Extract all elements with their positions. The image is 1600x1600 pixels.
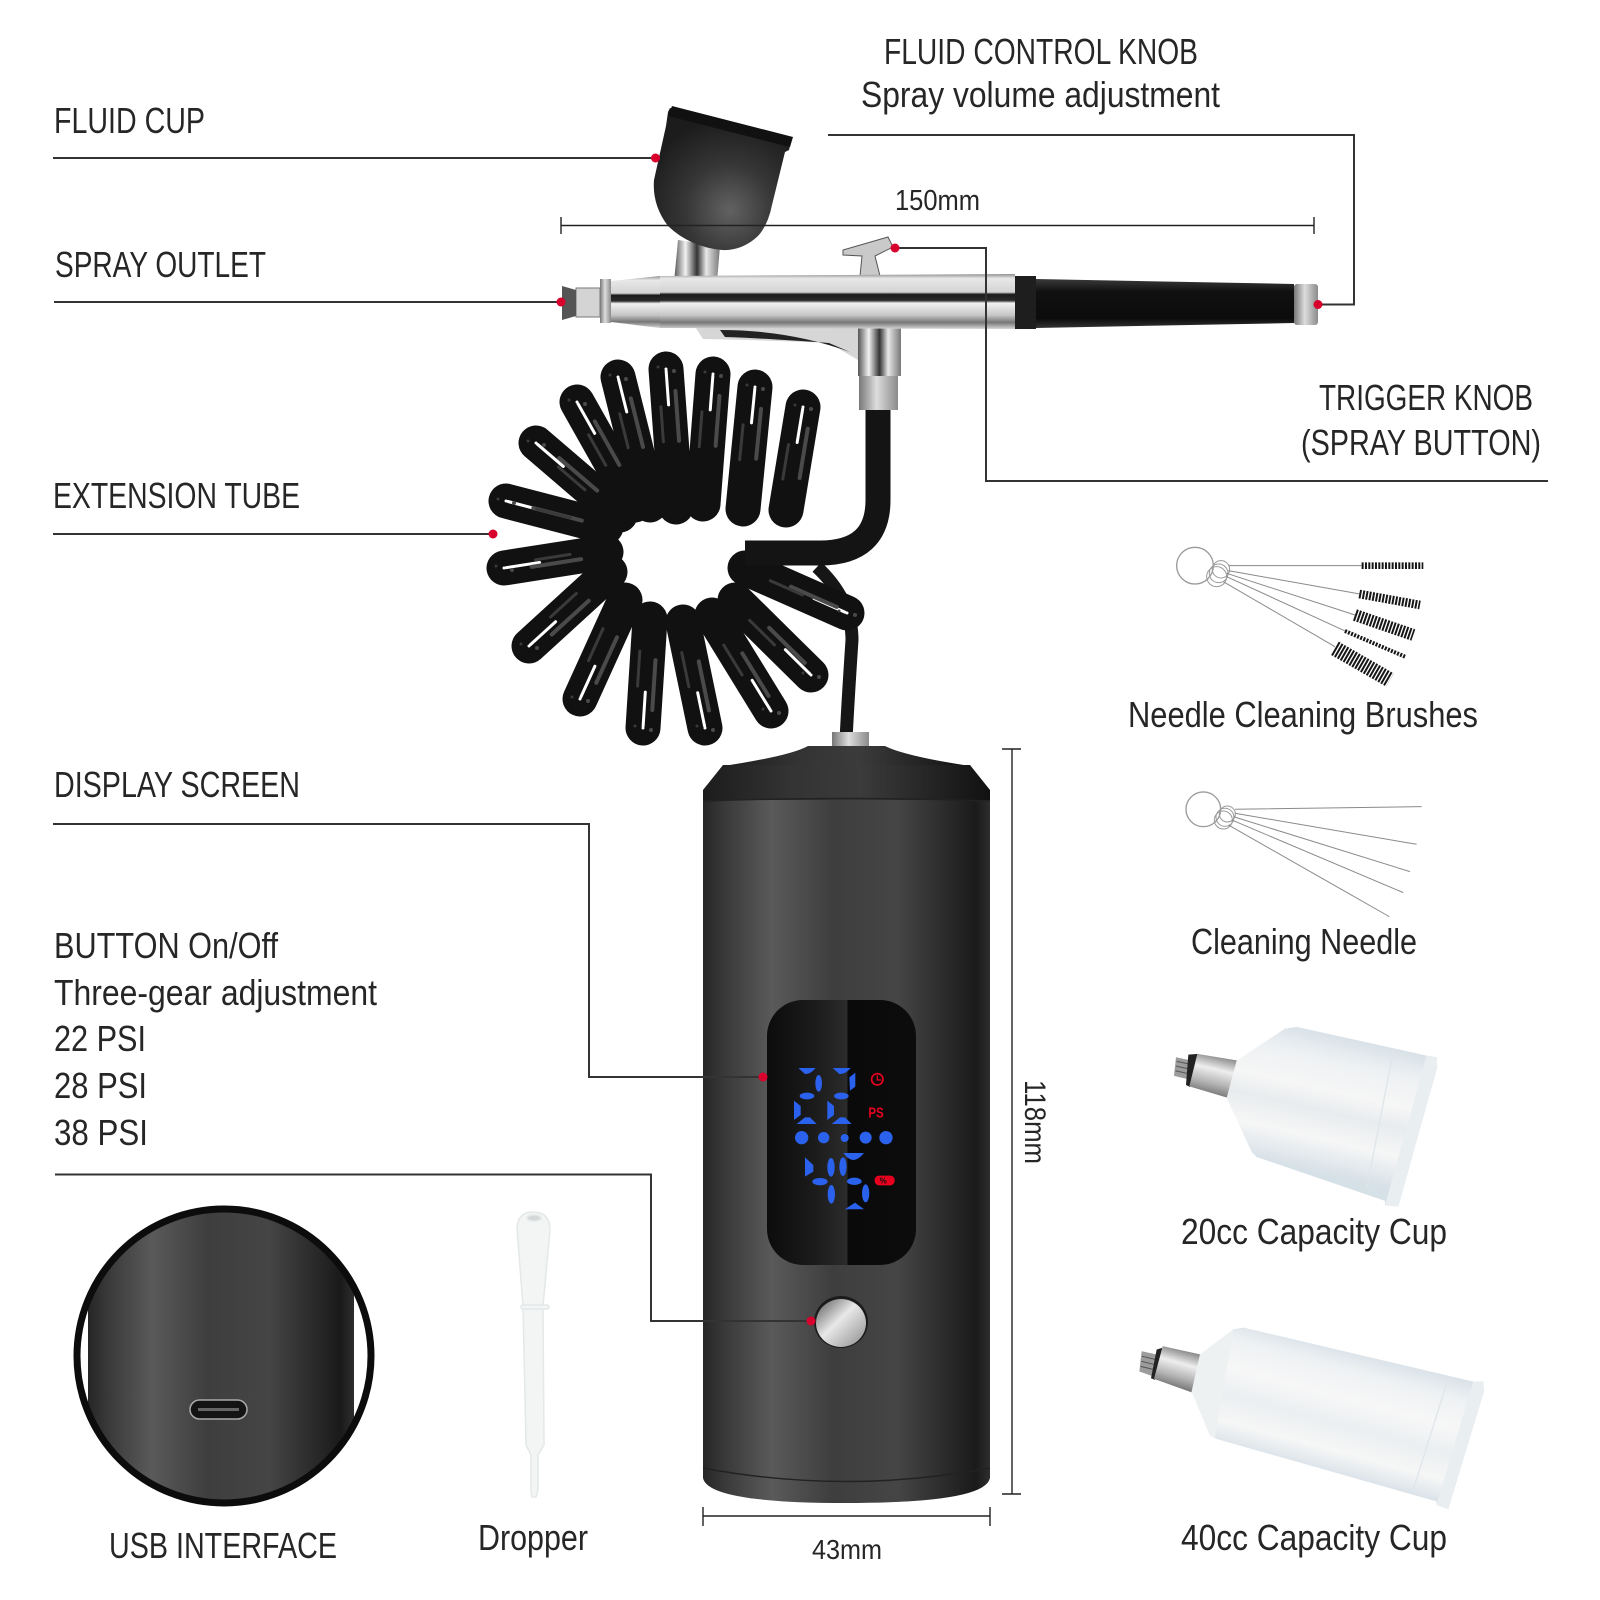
label: button and pressure settings: 22 PSI [54,1018,146,1059]
label: 20cc capacity cup: 20cc Capacity Cup [1181,1211,1447,1252]
fluid cup [654,108,792,250]
compressor unit [703,746,990,1503]
coiled extension tube [496,367,855,730]
label: button and pressure settings: Three-gear adjustment [54,972,377,1013]
20cc capacity cup [1174,1027,1437,1207]
dimension 118mm [1002,749,1051,1494]
leader: spray outlet [54,298,566,306]
label: button and pressure settings [54,925,377,1153]
air valve stem [858,318,901,376]
label: fluid control knob: Spray volume adjustment [861,74,1220,115]
upper hose [745,408,878,553]
hose down to compressor [817,567,869,748]
leader: extension tube [53,530,498,538]
dropper [517,1212,550,1497]
display digits [794,1068,893,1209]
label: spray outlet: SPRAY OUTLET [55,244,266,285]
needle cleaning brushes [1177,547,1423,680]
display indicators [868,1074,895,1185]
dimension 43mm [703,1507,990,1565]
dimension 150mm [561,185,1314,234]
leader: power button [55,1174,816,1326]
label: fluid control knob: FLUID CONTROL KNOB [884,31,1198,72]
front cone [611,276,660,328]
label: display screen: DISPLAY SCREEN [54,764,300,805]
nozzle [600,279,611,323]
black handle [1036,279,1294,328]
dimension 118mm: 118mm [1018,1080,1051,1164]
airbrush [562,106,1318,553]
display indicators: % [880,1176,887,1185]
usb interface detail [77,1209,371,1503]
compressor body [703,800,990,1503]
power button [814,1296,868,1348]
label: 40cc capacity cup: 40cc Capacity Cup [1181,1517,1447,1558]
label: button and pressure settings: 28 PSI [54,1065,147,1106]
leader: trigger knob [890,244,1548,481]
compressor shoulder [703,765,990,802]
label: button and pressure settings: BUTTON On/Off [54,925,279,966]
label: trigger knob [1301,377,1541,463]
label: usb interface: USB INTERFACE [109,1525,337,1566]
label: cleaning needle: Cleaning Needle [1191,921,1417,962]
label: trigger knob: (SPRAY BUTTON) [1301,422,1541,463]
chrome body [660,274,1015,329]
trigger [843,237,893,276]
label: fluid control knob [861,31,1220,115]
leader: fluid control knob [828,135,1354,309]
usb-c port [190,1400,247,1419]
screen [767,1000,916,1265]
end knob [1294,284,1318,325]
label: trigger knob: TRIGGER KNOB [1319,377,1533,418]
label: needle cleaning brushes: Needle Cleaning Brushes [1128,694,1478,735]
dimension 150mm: 150mm [895,185,980,217]
label: extension tube: EXTENSION TUBE [53,475,300,516]
cup stem [674,240,720,282]
hose connector knurl [859,375,898,410]
label: fluid cup: FLUID CUP [54,100,205,141]
display indicators: PS [868,1105,884,1121]
cleaning needles [1186,792,1422,917]
40cc capacity cup [1139,1328,1484,1509]
label: button and pressure settings: 38 PSI [54,1112,148,1153]
label: dropper: Dropper [478,1517,588,1558]
leader: display screen [53,824,768,1082]
dimension 43mm: 43mm [812,1534,882,1565]
compressor top cone [723,746,970,766]
trigger handle [694,325,863,360]
leader: fluid cup [53,154,660,162]
